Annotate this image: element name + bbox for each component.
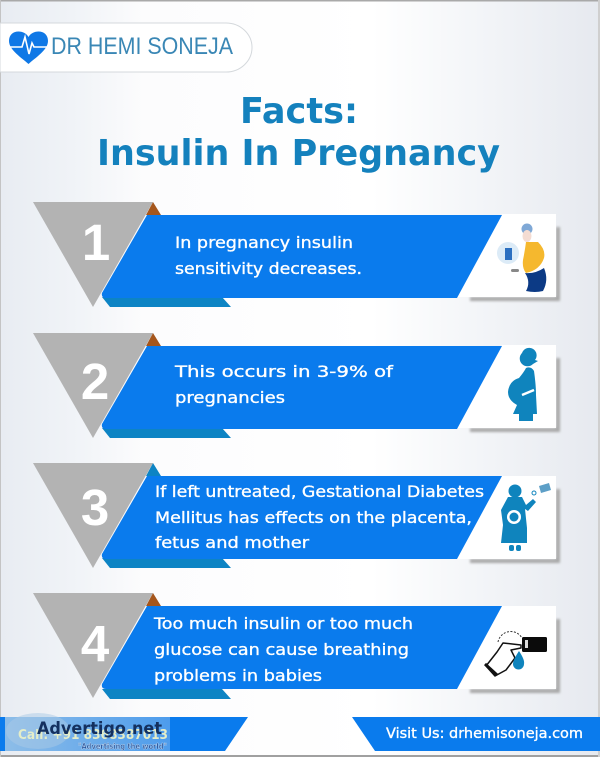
panel: fact 1 — [33, 202, 560, 307]
title: Facts: — [240, 91, 358, 132]
white card — [457, 606, 556, 689]
blue banner — [102, 346, 502, 429]
card shadow — [470, 489, 560, 563]
watermark overlay — [5, 713, 170, 751]
fact text: fetus and mother — [155, 533, 309, 552]
number 3: 3 — [81, 479, 109, 536]
brown corner tip — [146, 202, 161, 215]
dark ribbon — [102, 558, 231, 568]
blue banner — [102, 215, 502, 298]
dark ribbon — [102, 428, 231, 438]
dark ribbon — [102, 689, 231, 699]
fact text: This occurs in 3-9% of — [174, 362, 393, 381]
teal corner tip — [146, 463, 161, 476]
logo text: DR HEMI SONEJA — [51, 33, 233, 60]
fact text: pregnancies — [175, 388, 285, 407]
title — [97, 91, 500, 174]
fact text: In pregnancy insulin — [175, 233, 353, 252]
grey triangle — [33, 202, 153, 307]
watermark slogan: "Advertising the world" — [78, 742, 167, 751]
website text: Visit Us: drhemisoneja.com — [386, 726, 583, 742]
panel: fact 4 — [33, 593, 560, 699]
icon: finger prick test — [485, 632, 547, 676]
watermark name: Advertigo.net — [37, 719, 162, 739]
footer bar: call — [0, 713, 248, 751]
fact text — [174, 362, 393, 407]
white card — [457, 345, 556, 428]
dark ribbon — [102, 297, 231, 307]
icon: pregnant woman with message — [501, 483, 551, 551]
icon: heart with pulse — [9, 32, 48, 64]
blue banner — [102, 606, 502, 689]
number 4: 4 — [81, 615, 110, 672]
fact text: Too much insulin or too much — [153, 614, 413, 633]
title: Insulin In Pregnancy — [97, 133, 500, 174]
fact text: Mellitus has effects on the placenta, — [155, 508, 472, 527]
fact text — [175, 233, 362, 278]
brown corner tip — [146, 333, 161, 346]
blue banner — [102, 476, 502, 559]
fact text — [155, 482, 484, 552]
panel: fact 2 — [33, 333, 560, 438]
fact text: If left untreated, Gestational Diabetes — [155, 482, 484, 501]
fact text — [153, 614, 413, 685]
call text: Call: +91 8368387013 — [18, 728, 168, 743]
number 1: 1 — [82, 214, 110, 271]
logo pill — [0, 23, 252, 72]
grey triangle — [33, 593, 153, 698]
icon: woman checking glucose — [497, 224, 546, 292]
white card — [457, 214, 556, 297]
grey triangle — [33, 463, 153, 568]
fact text: problems in babies — [154, 666, 322, 685]
fact text: glucose can cause breathing — [154, 640, 409, 659]
card shadow — [470, 619, 560, 693]
brown corner tip — [146, 593, 161, 606]
panel: fact 3 — [33, 463, 560, 568]
card shadow — [470, 358, 560, 432]
number 2: 2 — [81, 353, 109, 410]
fact text: sensitivity decreases. — [175, 259, 362, 278]
white card — [457, 476, 556, 559]
card shadow — [470, 227, 560, 301]
grey triangle — [33, 333, 153, 438]
icon: pregnant silhouette — [508, 348, 538, 421]
footer bar: website — [352, 717, 600, 751]
